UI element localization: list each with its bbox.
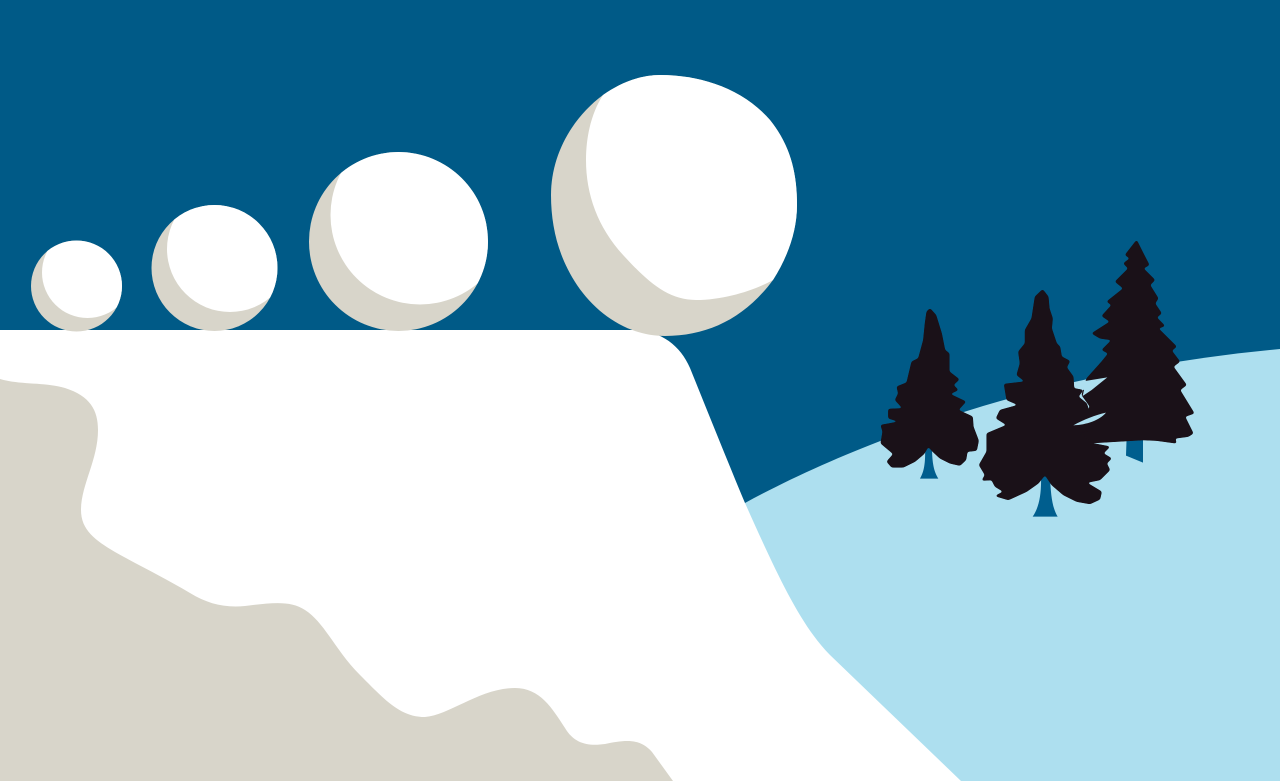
snowball 2 bbox=[152, 205, 278, 331]
distant hill bbox=[745, 349, 1280, 781]
tree trunk: left bbox=[920, 447, 938, 479]
pine tree: middle bbox=[979, 289, 1112, 504]
group: three pine trees bbox=[881, 240, 1194, 517]
tree trunk: middle bbox=[1033, 475, 1058, 517]
snowball 3 bbox=[309, 152, 488, 331]
pine tree: left bbox=[881, 308, 979, 467]
snowball 4 bbox=[551, 75, 797, 336]
snow cliff bbox=[0, 330, 961, 781]
pine tree: right bbox=[1073, 240, 1194, 443]
cliff shadow bbox=[0, 379, 673, 781]
tree trunk: right bbox=[1126, 437, 1143, 463]
snowball 1 bbox=[31, 240, 122, 332]
gap: hill seen between trees bbox=[1073, 377, 1107, 425]
